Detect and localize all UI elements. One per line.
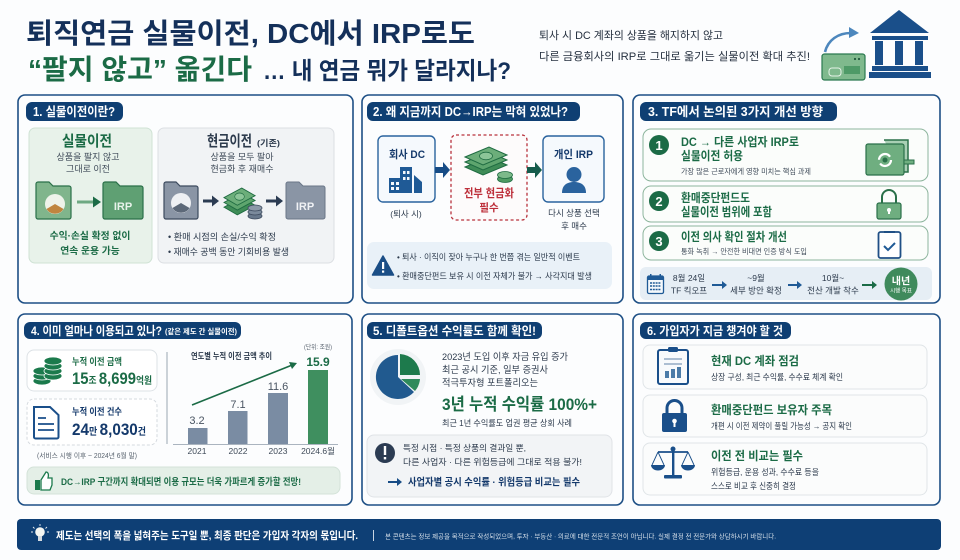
icon: IRP folder gray: IRP [296, 201, 314, 213]
box: company DC [378, 136, 435, 202]
arrow: upward trend [192, 362, 297, 405]
icon: bank with transfer arrow [822, 10, 931, 80]
icon: person [562, 167, 586, 193]
bar chart: cumulative transfer amount: 2021 [188, 446, 207, 456]
badge: next year: 내년 [892, 274, 910, 288]
heading 5: 5. 디폴트옵션 수익률도 함께 확인! [373, 323, 536, 338]
icon: calendar [648, 274, 664, 294]
improvement 1: 1 [655, 138, 663, 153]
panel 5: default option returns [362, 314, 623, 505]
header title [26, 18, 511, 85]
header subtitle [539, 28, 810, 63]
bar chart: cumulative transfer amount: 2022 [229, 446, 248, 456]
heading 6: 6. 가입자가 지금 챙겨야 할 것 [647, 323, 783, 338]
heading 1 [26, 102, 123, 121]
arrow: compare [388, 478, 402, 486]
bar chart: cumulative transfer amount: 2024.6월 [301, 446, 335, 456]
card: cash transfer: 현금화 후 재매수 [211, 164, 273, 174]
box: must convert to cash: 필수 [479, 202, 499, 214]
bar chart: cumulative transfer amount: 11.6 [268, 381, 288, 393]
icon: navy lock [662, 400, 687, 432]
arrow: cash to IRP [527, 162, 542, 178]
bar chart: cumulative transfer amount: 7.1 [230, 399, 246, 411]
card: cash transfer: • 재매수 공백 동안 기회비용 발생 [168, 247, 289, 257]
bar chart: cumulative transfer amount: 2023 [269, 446, 288, 456]
header title: 퇴직연금 실물이전, DC에서 IRP로도 [26, 18, 475, 49]
improvement 3 [643, 226, 928, 260]
timeline: 8월 24일 [673, 273, 705, 283]
panel 2: why blocked [362, 95, 623, 303]
callout: caution [367, 435, 612, 497]
panel 4: usage so far [18, 314, 352, 505]
checklist 1: 상장 구성, 최근 수익률, 수수료 체계 확인 [711, 372, 843, 382]
improvement 3: 통화 녹취 → 안전한 비대면 인증 방식 도입 [681, 246, 807, 256]
arrow: to cash [203, 196, 219, 206]
stat: total count [27, 399, 157, 445]
label: rebuy: 다시 상품 선택 [548, 208, 600, 218]
timeline: 세부 방안 확정 [730, 286, 782, 296]
checklist 2: 개편 시 이전 제약이 풀릴 가능성 → 공지 확인 [711, 421, 852, 431]
heading 3 [640, 102, 837, 121]
stat: total amount: 15조 8,699억원 [72, 369, 152, 388]
chart: portfolio pie [370, 349, 426, 405]
heading 4 [24, 322, 241, 339]
improvement 2: 실물이전 범위에 포함 [681, 204, 772, 219]
arrow: to IRP [266, 196, 283, 206]
heading 1: 1. 실물이전이란? [33, 105, 115, 119]
header subtitle: 퇴사 시 DC 계좌의 상품을 해지하지 않고 [539, 28, 723, 42]
arrow: step 2 [788, 281, 802, 289]
heading 4: 4. 이미 얼마나 이용되고 있나? [31, 324, 162, 338]
arrow: step 3 [862, 281, 877, 289]
header subtitle: 다른 금융회사의 IRP로 그대로 옮기는 실물이전 확대 추진! [539, 50, 810, 63]
stat: total amount: 누적 이전 금액 [72, 356, 122, 368]
icon: cash stack [465, 147, 512, 182]
card: cash transfer: 현금이전 [207, 133, 252, 150]
heading 3: 3. TF에서 논의된 3가지 개선 방향 [648, 104, 823, 119]
checklist 2 [643, 395, 927, 437]
panel 3: three improvements [633, 95, 940, 303]
footer disclaimer: 본 콘텐츠는 정보 제공을 목적으로 작성되었으며, 투자 · 부동산 · 의료에 대한 전문적 조언이 아닙니다. 실제 결정 전 전문가와 상담하시기 바랍니다. [385, 532, 776, 540]
card: cash transfer: • 환매 시점의 손실/수익 확정 [168, 231, 276, 242]
improvement 3: 이전 의사 확인 절차 개선 [681, 229, 787, 244]
panel 1: what is in-kind transfer [18, 95, 353, 303]
text: default option summary [442, 351, 597, 428]
text: default option summary: 2023년 도입 이후 자금 유입 증가 [442, 351, 568, 363]
arrow: DC to cash [435, 162, 450, 178]
footer message: 제도는 선택의 폭을 넓혀주는 도구일 뿐, 최종 판단은 가입자 각자의 몫입니다. [56, 529, 358, 542]
text: default option summary: 최근 1년 수익률도 업권 평균 상회 사례 [442, 418, 572, 428]
text: default option summary: 최근 공시 기준, 일부 증권사 [442, 364, 548, 376]
callout: caution: 다른 사업자 · 다른 위험등급에 그대로 적용 불가! [403, 457, 582, 467]
icon: IRP folder green: IRP [114, 201, 132, 213]
header title: … 내 연금 뭐가 달라지나? [263, 58, 511, 85]
icon: clipboard chart [658, 347, 688, 384]
icon: exclamation [375, 443, 395, 463]
box: company DC: 회사 DC [389, 147, 425, 161]
note: blind spot: • 퇴사 · 이직이 잦아 누구나 한 번쯤 겪는 일반적 이벤트 [397, 252, 580, 262]
icon: portfolio folder gray [164, 182, 198, 219]
card: in-kind transfer: 실물이전 [62, 133, 112, 150]
box: must convert to cash [451, 135, 527, 220]
icon: office building [389, 167, 422, 193]
callout: caution: 특정 시점 · 특정 상품의 결과일 뿐, [403, 443, 526, 453]
checklist 3: 위험등급, 운용 성과, 수수료 등을 [711, 467, 819, 477]
checklist 3: 스스로 비교 후 신중히 결정 [711, 481, 796, 491]
timeline: 10월~ [822, 273, 844, 283]
checklist 1 [643, 345, 927, 389]
card: cash transfer: (기존) [257, 138, 280, 148]
improvement 3: 3 [655, 234, 663, 249]
improvement 1: 가장 많은 근로자에게 영향 미치는 핵심 과제 [681, 166, 811, 176]
heading 4: (같은 제도 간 실물이전) [165, 326, 237, 336]
icon: IRP folder gray [286, 182, 325, 219]
improvement 2 [643, 186, 928, 222]
timeline: 전산 개발 착수 [807, 286, 859, 296]
card: in-kind transfer: 수익·손실 확정 없이 [50, 229, 130, 242]
badge: next year [884, 268, 918, 300]
card: cash transfer: 상품을 모두 팔아 [211, 151, 274, 162]
timeline: TF 킥오프 [671, 286, 707, 296]
footer banner [17, 519, 941, 550]
card: in-kind transfer: 그대로 이전 [66, 164, 110, 174]
bar chart: cumulative transfer amount [173, 342, 338, 456]
text: default option summary: 적극투자형 포트폴리오는 [442, 377, 538, 389]
checklist 2: 환매중단펀드 보유자 주목 [711, 402, 832, 417]
callout: outlook [27, 467, 340, 494]
badge: next year: 시행 목표 [890, 286, 912, 294]
icon: portfolio folder green [36, 182, 71, 219]
label: rebuy [548, 208, 600, 231]
improvement 2: 2 [655, 194, 663, 209]
checklist 1: 현재 DC 계좌 점검 [711, 353, 799, 368]
icon: warning [372, 256, 394, 275]
note: blind spot: • 환매중단펀드 보유 시 이전 자체가 불가 → 사각지대 발생 [397, 271, 592, 281]
text: default option summary: 3년 누적 수익률 100%+ [442, 395, 597, 414]
checklist 3 [643, 443, 927, 495]
note: period: (서비스 시행 이후 ~ 2024년 6월 말) [37, 451, 137, 460]
box: personal IRP [543, 136, 604, 202]
label: rebuy: 후 매수 [561, 221, 587, 231]
icon: thumbs up [35, 472, 52, 490]
icon: phone check [878, 231, 900, 258]
header title: “팔지 않고” 옮긴다 [28, 54, 252, 85]
card: in-kind transfer: 연속 운용 가능 [60, 244, 120, 257]
icon: document [34, 407, 58, 438]
card: cash transfer [158, 128, 334, 263]
improvement 1 [643, 129, 928, 181]
bar chart: cumulative transfer amount: 3.2 [189, 415, 205, 427]
note: blind spot [367, 242, 612, 289]
arrow: step 1 [712, 281, 727, 289]
icon: wallet with cycle [866, 140, 914, 175]
label: on leaving: (퇴사 시) [390, 209, 422, 219]
checklist 3: 이전 전 비교는 필수 [711, 449, 803, 463]
card: in-kind transfer: 상품을 팔지 않고 [57, 151, 119, 162]
panel 6: what to check [633, 314, 940, 505]
timeline: ~9월 [747, 273, 765, 283]
icon: light bulb [31, 524, 49, 541]
box: personal IRP: 개인 IRP [554, 148, 593, 161]
callout: caution: 사업자별 공시 수익률 · 위험등급 비교는 필수 [408, 476, 580, 488]
icon: cash and coins [224, 188, 262, 219]
icon: scales [651, 446, 695, 478]
callout: outlook: DC→IRP 구간까지 확대되면 이용 규모는 더욱 가파르게 증가할 전망! [61, 476, 301, 488]
timeline [640, 267, 932, 300]
card: in-kind transfer [29, 128, 152, 263]
stat: total count: 누적 이전 건수 [72, 406, 122, 418]
improvement 1: 실물이전 허용 [681, 149, 743, 163]
bar chart: cumulative transfer amount: (단위: 조원) [304, 342, 332, 351]
stat: total count: 24만 8,030건 [72, 420, 146, 439]
heading 2: 2. 왜 지금까지 DC→IRP는 막혀 있었나? [373, 104, 568, 119]
stat: total amount [27, 350, 157, 391]
icon: coin stack [33, 357, 62, 385]
bar chart: cumulative transfer amount: 15.9 [306, 355, 330, 369]
bar chart: cumulative transfer amount: 연도별 누적 이전 금액 추이 [191, 351, 272, 361]
arrow: direct transfer [77, 196, 101, 208]
improvement 1: DC → 다른 사업자 IRP로 [681, 134, 799, 149]
box: must convert to cash: 전부 현금화 [464, 186, 514, 200]
icon: green lock [877, 190, 901, 219]
improvement 2: 환매중단펀드도 [681, 190, 750, 205]
